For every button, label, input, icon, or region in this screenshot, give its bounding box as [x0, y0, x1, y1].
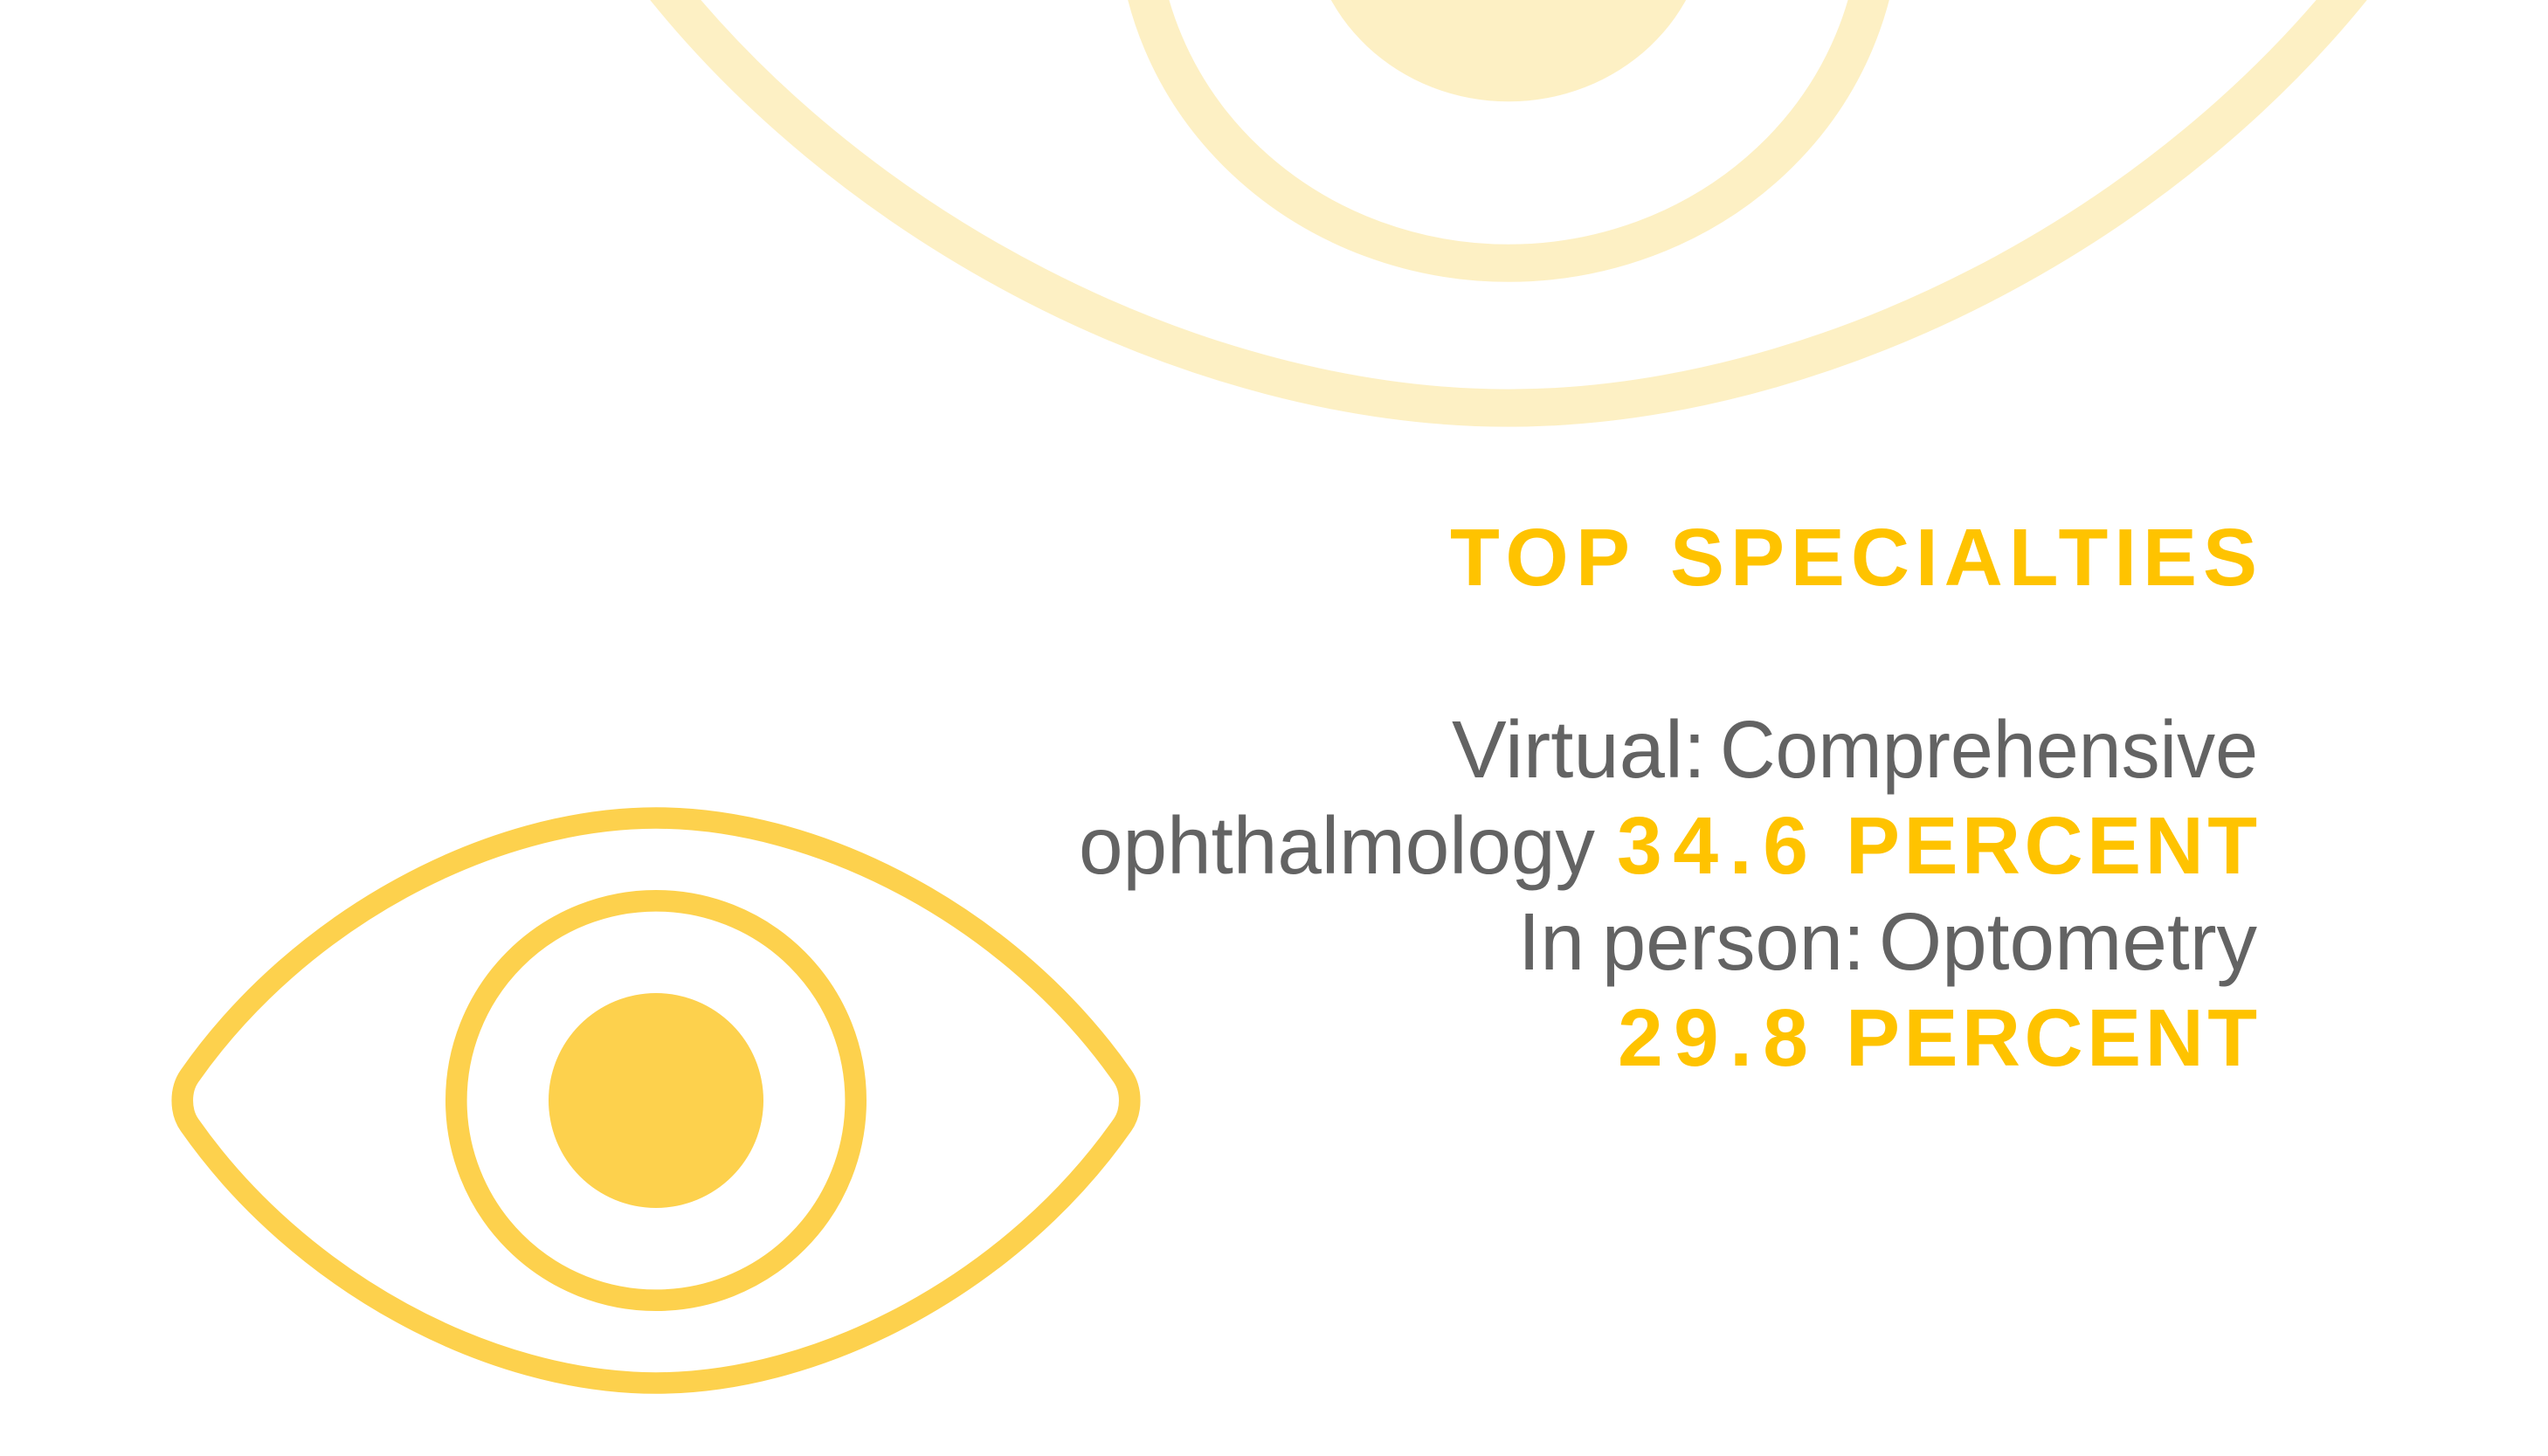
stat: virtual percentage: 34.6 — [1617, 800, 1808, 891]
line: in person specialty: Optometry — [1879, 896, 2257, 987]
heading: top specialties: SPECIALTIES — [1670, 512, 2257, 603]
icon: large pale eye cropped at top — [627, 0, 2390, 408]
line: in person specialty — [1518, 896, 2257, 987]
line: virtual specialty: Virtual: — [1452, 704, 1706, 795]
text block: specialty statistics — [1079, 704, 2258, 1083]
line: virtual specialty — [1452, 704, 2258, 795]
icon: small yellow eye — [183, 818, 1129, 1384]
line: in person specialty: person: — [1602, 896, 1865, 987]
line: ophthalmology label: ophthalmology — [1079, 800, 1595, 891]
stat: virtual percentage — [1617, 800, 2257, 891]
line: virtual specialty: Comprehensive — [1720, 704, 2258, 795]
stat: virtual percentage: PERCENT — [1846, 800, 2257, 891]
heading: top specialties: TOP — [1450, 512, 1630, 603]
stat: in person percentage: 29.8 — [1618, 992, 1808, 1083]
line: in person specialty: In — [1518, 896, 1585, 987]
stat: in person percentage — [1618, 992, 2257, 1083]
stat: in person percentage: PERCENT — [1846, 992, 2257, 1083]
